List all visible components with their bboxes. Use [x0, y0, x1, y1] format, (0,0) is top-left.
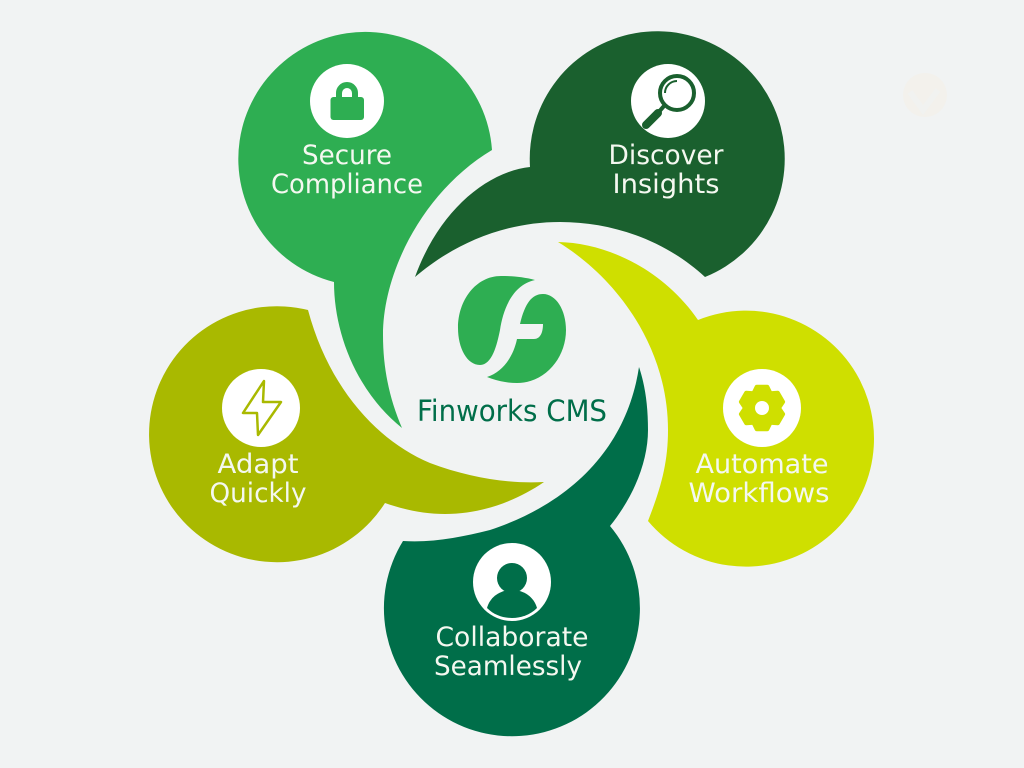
- icon: lightning bolt: [222, 369, 300, 447]
- faint watermark badge: [903, 73, 947, 117]
- label: Quickly: [210, 478, 307, 509]
- label: [434, 622, 588, 682]
- logo mark: [458, 276, 566, 383]
- petal shape: [384, 367, 648, 736]
- icon: lock: [310, 64, 384, 138]
- petal shape: [415, 31, 785, 277]
- center logo: Finworks CMS: [417, 276, 607, 428]
- label: Insights: [612, 169, 720, 200]
- label: Seamlessly: [434, 651, 582, 682]
- petal shape: [149, 306, 544, 562]
- logo text: Finworks CMS: [417, 394, 607, 428]
- label: Automate: [696, 449, 828, 480]
- label: [210, 449, 307, 509]
- panel: Collaborate Seamlessly: [384, 367, 648, 736]
- label: [271, 140, 423, 200]
- label: Secure: [302, 140, 392, 171]
- panel: Automate Workflows: [558, 242, 874, 567]
- icon: person: [473, 543, 551, 621]
- panel: Adapt Quickly: [149, 306, 544, 562]
- label: Collaborate: [436, 622, 588, 653]
- icon: magnifying glass: [631, 64, 705, 138]
- label: Workflows: [688, 478, 830, 509]
- panel: Secure Compliance: [238, 32, 492, 428]
- label: Discover: [608, 140, 724, 171]
- petal shape: [238, 32, 492, 428]
- label: [608, 140, 724, 200]
- panel: Discover Insights: [415, 31, 785, 277]
- icon: gear: [723, 369, 801, 447]
- label: [688, 449, 830, 509]
- petal shape: [558, 242, 874, 567]
- label: Adapt: [218, 449, 298, 480]
- label: Compliance: [271, 169, 423, 200]
